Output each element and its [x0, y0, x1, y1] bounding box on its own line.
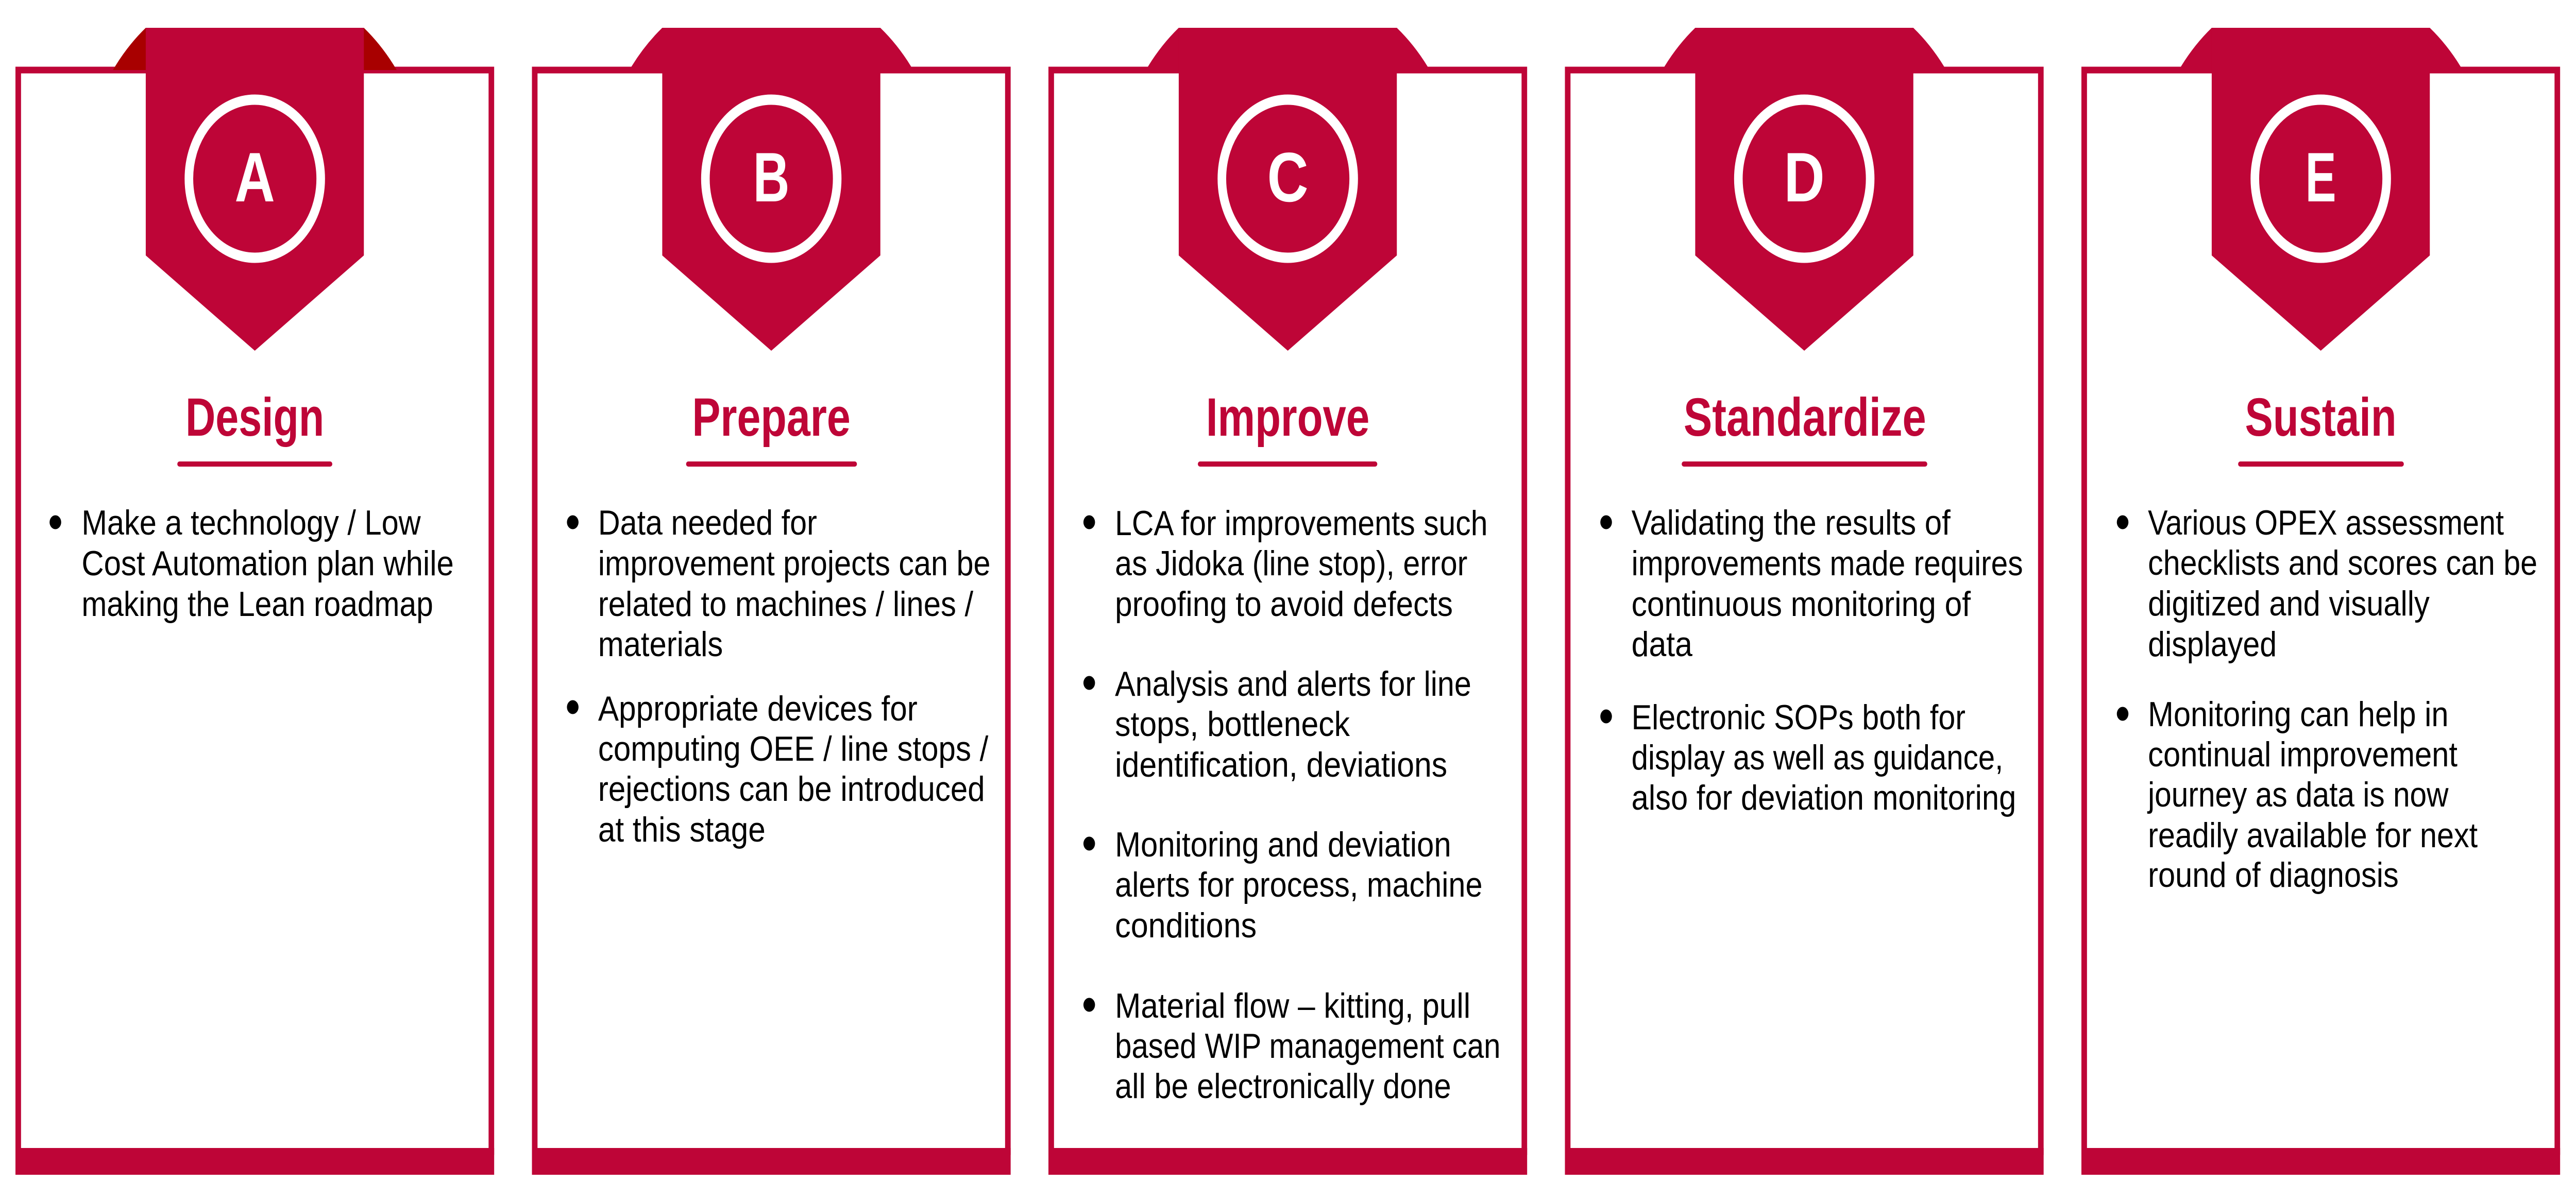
ribbon badge	[146, 28, 364, 351]
heading: Design: Design	[185, 388, 324, 448]
bullet list: checklists and scores can be	[2148, 543, 2537, 582]
ribbon badge	[1695, 28, 1913, 351]
icon: letter circle C: C	[1267, 138, 1309, 216]
ribbon tab arch	[113, 28, 397, 70]
panel: B Prepare	[532, 28, 1011, 1175]
bullet list: Monitoring and deviation	[1115, 825, 1451, 864]
heading underline	[2238, 461, 2404, 467]
bullet list: digitized and visually	[2148, 584, 2430, 623]
bullet list: Data needed for	[598, 503, 817, 542]
bullet list: Material flow – kitting, pull	[1115, 986, 1470, 1025]
bullet list	[567, 503, 991, 849]
bullet list	[2117, 503, 2537, 895]
heading underline	[1682, 461, 1927, 467]
bullet list: display as well as guidance,	[1632, 738, 2003, 777]
bullet list: data	[1632, 625, 1692, 664]
bullet list: proofing to avoid defects	[1115, 585, 1453, 624]
bullet list: alerts for process, machine	[1115, 865, 1482, 904]
ribbon tab arch	[1146, 28, 1430, 70]
ribbon tab arch	[630, 28, 913, 70]
ribbon tab arch	[1663, 28, 1946, 70]
ribbon badge	[2212, 28, 2430, 351]
heading: Standardize: Standardize	[1684, 388, 1926, 448]
icon: letter circle E	[2255, 100, 2386, 258]
bullet list: LCA for improvements such	[1115, 504, 1488, 543]
ribbon badge	[662, 28, 880, 351]
card frame	[1565, 70, 2044, 1175]
bullet list: related to machines / lines /	[598, 585, 974, 624]
card frame	[1048, 70, 1527, 1175]
icon: letter circle B: B	[753, 138, 790, 216]
bullet list: stops, bottleneck	[1115, 705, 1350, 744]
card frame	[2081, 70, 2560, 1175]
bullet list: displayed	[2148, 625, 2277, 664]
bullet list: Electronic SOPs both for	[1632, 698, 1965, 737]
bullet list	[1600, 503, 2023, 817]
bullet list: computing OEE / line stops /	[598, 729, 989, 768]
bullet list: identification, deviations	[1115, 745, 1447, 784]
bullet list: Various OPEX assessment	[2148, 503, 2504, 542]
bullet list: readily available for next	[2148, 816, 2478, 855]
icon: letter circle D: D	[1784, 138, 1825, 216]
ribbon tab arch	[2179, 28, 2463, 70]
bullet list	[1083, 504, 1500, 1106]
bullet list: continuous monitoring of	[1632, 585, 1971, 624]
bullet list: all be electronically done	[1115, 1067, 1451, 1106]
card frame	[15, 70, 494, 1175]
bullet list: Validating the results of	[1632, 503, 1951, 542]
bullet list: rejections can be introduced	[598, 769, 985, 809]
heading underline	[1198, 461, 1377, 467]
panel: E Sustain	[2081, 28, 2560, 1175]
icon: letter circle E: E	[2306, 138, 2336, 216]
ribbon badge	[1179, 28, 1397, 351]
bullet list	[49, 503, 454, 624]
bullet list: journey as data is now	[2147, 775, 2449, 814]
bullet list: also for deviation monitoring	[1632, 778, 2016, 817]
heading underline	[686, 461, 857, 467]
bullet list: making the Lean roadmap	[81, 585, 433, 624]
bullet list: based WIP management can	[1115, 1026, 1501, 1066]
heading: Improve: Improve	[1206, 388, 1369, 448]
panel: C Improve	[1048, 28, 1527, 1175]
bullet list: improvement projects can be	[598, 544, 991, 583]
panel: A Design	[15, 28, 494, 1175]
bullet list: materials	[598, 625, 723, 664]
heading underline	[177, 461, 332, 467]
heading: Prepare: Prepare	[692, 388, 851, 448]
bullet list: improvements made requires	[1632, 544, 2023, 583]
bullet list: Appropriate devices for	[598, 689, 918, 728]
bullet list: at this stage	[598, 810, 766, 849]
bullet list: Analysis and alerts for line	[1115, 664, 1471, 704]
heading: Sustain: Sustain	[2245, 388, 2397, 448]
icon: letter circle A	[189, 100, 320, 258]
bullet list: conditions	[1115, 906, 1257, 945]
panel: D Standardize	[1565, 28, 2044, 1175]
bullet list: continual improvement	[2148, 735, 2458, 774]
icon: letter circle C	[1222, 100, 1354, 258]
icon: letter circle A: A	[234, 138, 275, 216]
bullet list: Monitoring can help in	[2148, 695, 2448, 734]
bullet list: Make a technology / Low	[81, 503, 421, 542]
card frame	[532, 70, 1011, 1175]
bullet list: Cost Automation plan while	[81, 544, 454, 583]
bullet list: round of diagnosis	[2148, 855, 2399, 895]
bullet list: as Jidoka (line stop), error	[1115, 544, 1467, 583]
icon: letter circle D	[1738, 100, 1870, 258]
icon: letter circle B	[705, 100, 837, 258]
